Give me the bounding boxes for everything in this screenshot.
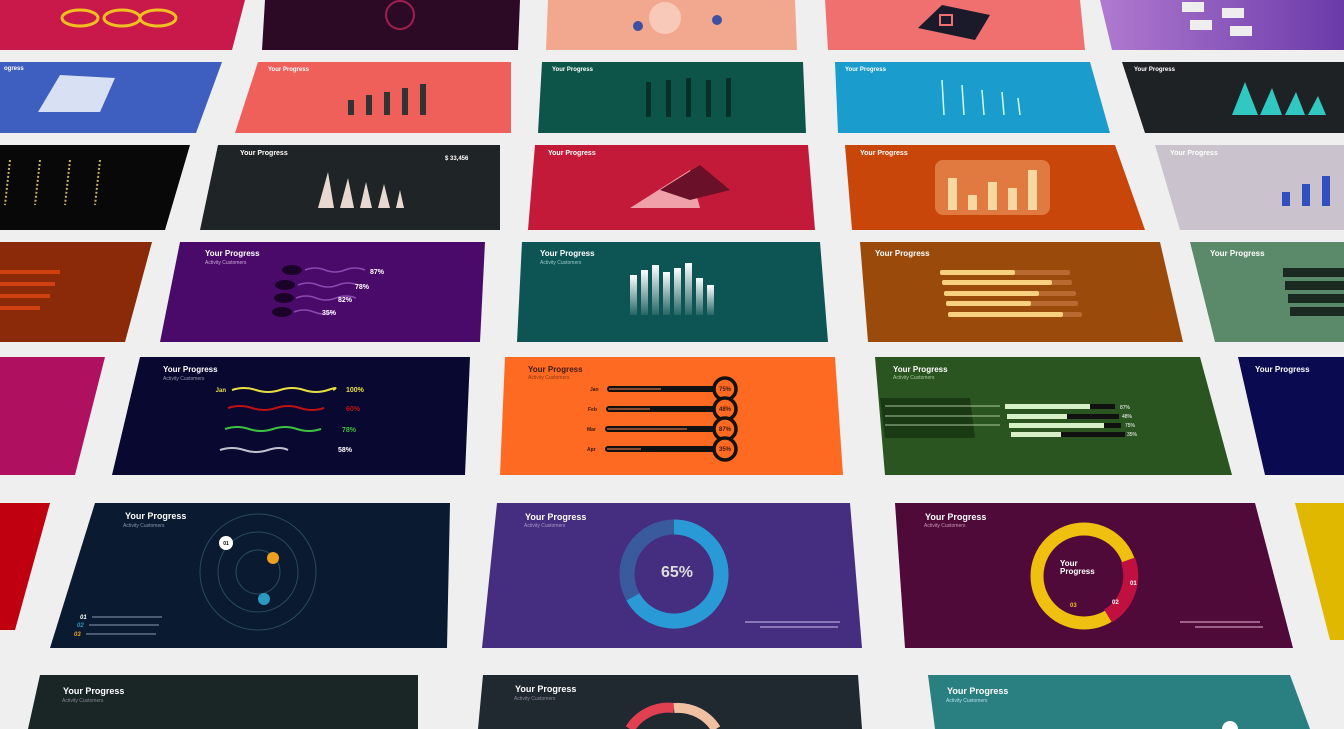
panel: green bars: 87% (1120, 405, 1131, 411)
panel: yellow/red donut: Activity Customers (924, 523, 966, 529)
row 5 tiles: 78% (342, 427, 357, 434)
row 4 tiles: Your Progress (1210, 249, 1265, 258)
panel: orange progress bars: Feb (588, 407, 597, 413)
row 5 tiles: 100% (346, 387, 365, 394)
row 2 tiles: Your Progress (845, 67, 887, 73)
panel: yellow/red donut: Your (1060, 559, 1078, 568)
panel: orbit: 03 (74, 632, 81, 638)
panel: orbit: Your Progress (125, 511, 186, 521)
panel: 65% donut (482, 503, 862, 648)
row 5 tiles: 60% (346, 406, 361, 413)
row 5 tiles (0, 357, 470, 475)
row 2 tiles: Your Progress (1134, 67, 1176, 73)
panel: orange progress bars: Activity Customers (528, 375, 570, 381)
row 5 tiles: Your Progress (163, 365, 218, 374)
row 3 tiles: Your Progress (860, 150, 908, 157)
panel: green bars: 35% (1127, 432, 1138, 438)
panel: orange progress bars: Mar (587, 427, 596, 433)
panel: green bars: Activity Customers (893, 375, 935, 381)
row 2 tiles: ogress (4, 66, 24, 72)
row 4 tiles: Your Progress (875, 249, 930, 258)
panel: green bars: Your Progress (893, 365, 948, 374)
row 4 tiles: 82% (338, 297, 353, 304)
panel: orbit: 01 (223, 541, 229, 547)
panel: orange progress bars: 75% (719, 387, 732, 393)
panel: yellow/red donut: 03 (1070, 603, 1077, 609)
row 2 tiles (0, 62, 1344, 133)
row 2 tiles: Your Progress (552, 67, 594, 73)
row 2 tiles: Your Progress (268, 67, 310, 73)
panel: 65% donut: 65% (661, 564, 693, 581)
row 3 tiles (0, 145, 1344, 230)
row 7 tiles: Your Progress (515, 684, 576, 694)
row 3 tiles: Your Progress (1170, 150, 1218, 157)
panel: orbit (50, 503, 450, 648)
panel: orange progress bars (500, 357, 843, 475)
panel: orbit: 01 (80, 615, 87, 621)
panel: yellow/red donut: 01 (1130, 581, 1137, 587)
panel: orange progress bars: 87% (719, 427, 732, 433)
row 1 tiles (0, 0, 1344, 50)
row 4 tiles: Activity Customers (540, 260, 582, 266)
row 4 tiles: Activity Customers (205, 260, 247, 266)
panel: orange progress bars: Apr (587, 447, 596, 453)
row 4 tiles: 35% (322, 310, 337, 317)
row 3 tiles: $ 33,456 (445, 156, 469, 162)
row 7 tiles: Activity Customers (62, 698, 104, 704)
panel: yellow/red donut: Progress (1060, 567, 1095, 576)
row 4 tiles: 78% (355, 284, 370, 291)
row 6 tiles (0, 503, 1344, 640)
row 3 tiles: Your Progress (240, 150, 288, 157)
panel: 65% donut: Your Progress (525, 512, 586, 522)
panel: yellow/red donut (895, 503, 1293, 648)
mosaic of slide tiles in perspective: Your Progress (1255, 365, 1310, 374)
row 4 tiles: Your Progress (205, 249, 260, 258)
panel: yellow/red donut: 02 (1112, 600, 1119, 606)
panel: green bars: 48% (1122, 414, 1133, 420)
row 4 tiles: 87% (370, 269, 385, 276)
row 5 tiles: Jan (216, 388, 226, 394)
panel: orange progress bars: Your Progress (528, 365, 583, 374)
row 3 tiles: Your Progress (548, 150, 596, 157)
panel: orange progress bars: 48% (719, 407, 732, 413)
row 4 tiles (0, 242, 1344, 342)
panel: orbit: 02 (77, 623, 84, 629)
row 5 tiles: Activity Customers (163, 376, 205, 382)
panel: green bars (875, 357, 1232, 475)
panel: 65% donut: Activity Customers (524, 523, 566, 529)
panel: green bars: 75% (1125, 423, 1136, 429)
row 7 tiles: Your Progress (947, 686, 1008, 696)
panel: orange progress bars: 35% (719, 447, 732, 453)
panel: orange progress bars: Jan (590, 387, 599, 393)
row 5 tiles: 58% (338, 447, 353, 454)
row 7 tiles: Your Progress (63, 686, 124, 696)
panel: yellow/red donut: Your Progress (925, 512, 986, 522)
row 7 tiles: Activity Customers (946, 698, 988, 704)
row 7 tiles (28, 675, 1310, 729)
panel: orbit: Activity Customers (123, 523, 165, 529)
row 4 tiles: Your Progress (540, 249, 595, 258)
row 7 tiles: Activity Customers (514, 696, 556, 702)
